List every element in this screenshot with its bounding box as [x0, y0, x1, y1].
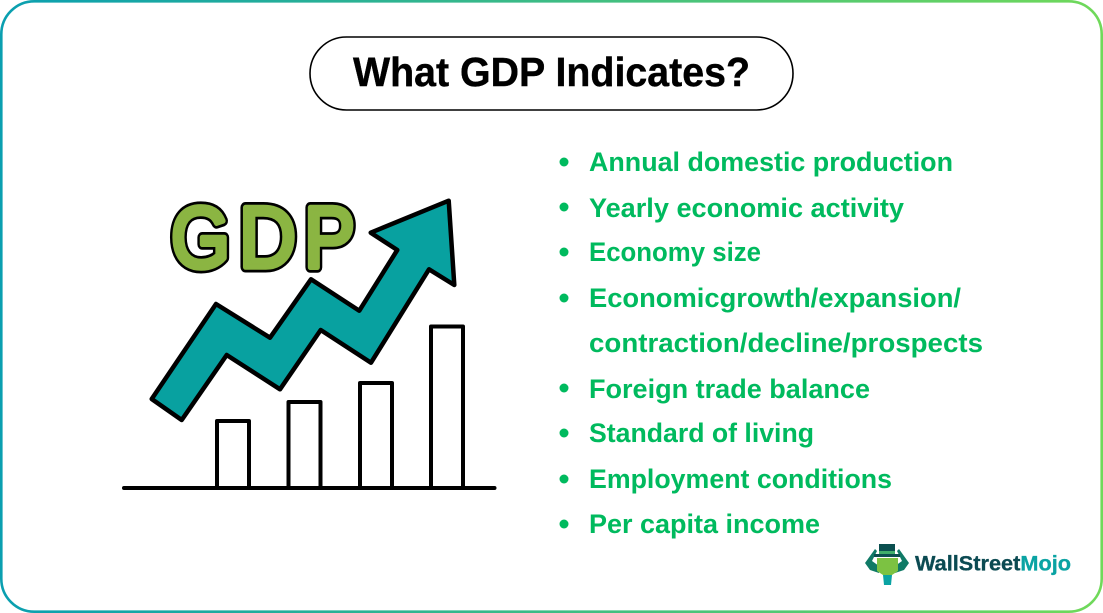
item: Yearly economic activity: [589, 193, 904, 223]
GDP lettering: G: [171, 190, 230, 286]
baseline: [124, 486, 494, 490]
icon: bull mascot: [865, 544, 909, 585]
item: Per capita income: [589, 509, 820, 539]
item: [560, 283, 983, 358]
GDP lettering: D: [239, 190, 296, 286]
logo: WallStreetMojo: [865, 544, 1071, 585]
icon: GDP growth chart: [124, 190, 494, 488]
item: Employment conditions: [589, 464, 892, 494]
GDP lettering: D: [239, 190, 296, 286]
item: Standard of living: [589, 418, 814, 448]
bars: [217, 326, 463, 488]
GDP lettering: P: [304, 190, 355, 286]
item: Annual domestic production: [589, 147, 953, 177]
heading: What GDP Indicates?: [353, 49, 750, 95]
title pill: [310, 37, 793, 110]
GDP lettering: [171, 190, 355, 286]
bullet list: [560, 147, 983, 539]
item: Economicgrowth/expansion/: [589, 283, 962, 313]
item: Foreign trade balance: [589, 374, 870, 404]
GDP lettering: G: [171, 190, 230, 286]
item: contraction/decline/prospects: [589, 328, 983, 358]
GDP lettering: P: [304, 190, 355, 286]
wordmark: WallStreetMojo: [915, 552, 1071, 576]
arrow: [152, 201, 454, 420]
item: Economy size: [589, 237, 761, 267]
